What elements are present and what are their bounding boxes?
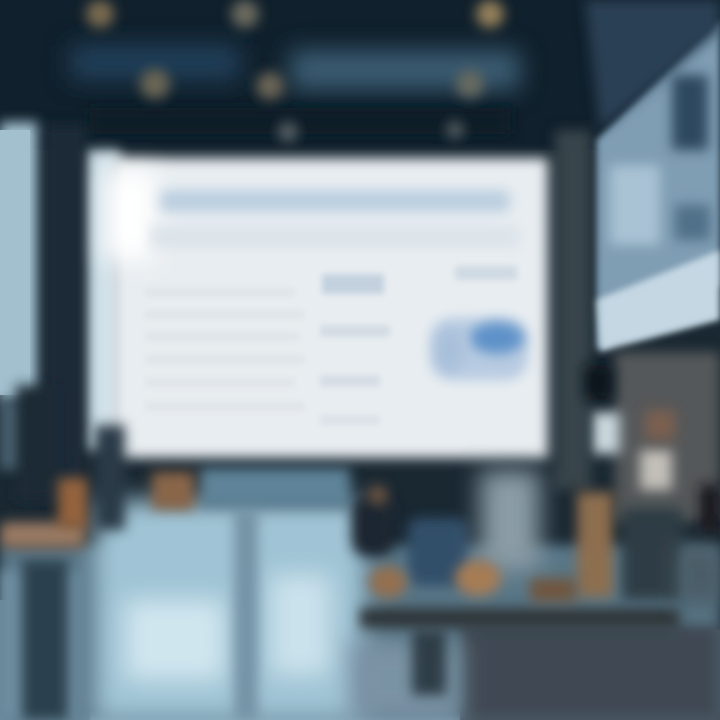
- right seating group: [352, 470, 720, 628]
- right upper windows: [585, 0, 720, 352]
- band under screen: [200, 468, 350, 508]
- pillar left: [16, 125, 86, 500]
- left window: [0, 122, 120, 470]
- floor: [0, 500, 720, 720]
- screen blue chart blob: [430, 318, 528, 380]
- screen subtitle band: [150, 225, 520, 249]
- screen left text block: [145, 288, 305, 411]
- screen middle text block: [320, 274, 390, 425]
- screen right heading: [455, 266, 517, 280]
- right lower wall: [590, 352, 720, 522]
- ceiling: [70, 0, 520, 142]
- screen bright corner: [105, 170, 155, 260]
- presentation screen: [105, 158, 548, 458]
- pillar right: [555, 130, 612, 490]
- left furniture: [0, 425, 194, 548]
- screen title bar: [160, 190, 510, 212]
